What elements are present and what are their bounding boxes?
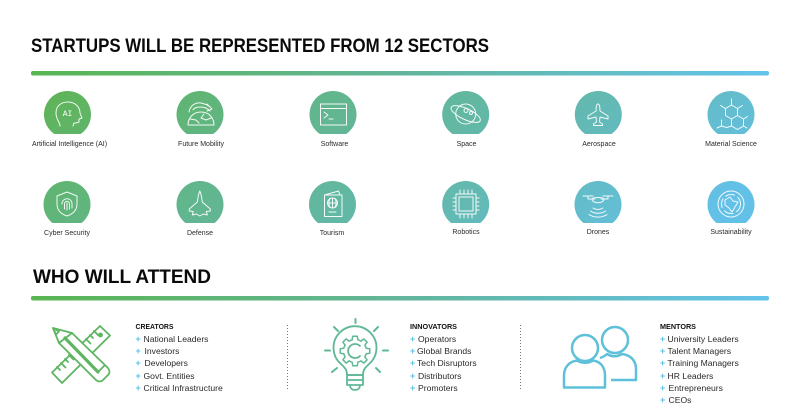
sector: Space: Space	[457, 141, 477, 148]
mentors list: +	[660, 371, 665, 381]
sector: Robotics: Robotics	[452, 229, 480, 236]
innovators list: +	[410, 383, 415, 393]
innovators list: Distributors	[418, 371, 461, 381]
innovators list: Operators	[418, 334, 456, 344]
sector: Material Science: Material Science	[705, 141, 757, 148]
mentors list: Entrepreneurs	[668, 383, 723, 393]
innovators list: Global Brands	[417, 346, 471, 356]
mentors list: CEOs	[668, 395, 691, 405]
sector: Future Mobility	[176, 91, 224, 148]
divider bar: top	[31, 71, 769, 76]
sector: Software	[310, 91, 356, 148]
creators list: +	[136, 383, 141, 393]
sector: Cyber Security: Cyber Security	[44, 230, 90, 237]
creators list: +	[136, 346, 141, 356]
sector: Artificial Intelligence: AI	[63, 110, 72, 119]
sector: Sustainability: Sustainability	[710, 229, 752, 236]
mentors list: Training Managers	[668, 358, 739, 368]
sector: Defense: Defense	[187, 230, 213, 237]
separator: right	[520, 325, 522, 389]
creators list: CREATORS	[136, 322, 174, 331]
sector: Tourism	[309, 181, 356, 237]
creators list: Investors	[144, 346, 179, 356]
sector: Artificial Intelligence	[32, 91, 107, 148]
creators list: Developers	[144, 358, 188, 368]
sector: Sustainability	[708, 181, 754, 236]
sector: Defense	[176, 181, 224, 237]
innovators list: INNOVATORS	[410, 322, 457, 331]
sector: Aerospace	[575, 91, 622, 148]
sector: Drones: Drones	[587, 229, 610, 236]
mentors list: Talent Managers	[668, 346, 731, 356]
creators list: +	[136, 358, 141, 368]
mentors list: HR Leaders	[668, 371, 713, 381]
innovators list: Tech Disruptors	[417, 358, 477, 368]
creators list: +	[136, 334, 141, 344]
sector: Robotics	[442, 181, 489, 236]
sector: Material Science	[705, 91, 757, 148]
mentors list: MENTORS	[660, 322, 696, 331]
sector: Artificial Intelligence: Artificial Intelligence (AI)	[32, 141, 107, 148]
mentors list: +	[660, 395, 665, 405]
creators list: Govt. Entities	[144, 371, 195, 381]
title: startups: STARTUPS WILL BE REPRESENTED FROM 12 SECTORS	[31, 35, 489, 57]
separator: left	[286, 325, 288, 389]
sector: Tourism: Tourism	[320, 230, 344, 237]
innovators list: +	[410, 346, 415, 356]
creators list	[136, 322, 223, 393]
sector: Aerospace: Aerospace	[582, 141, 616, 148]
icon: people	[564, 327, 636, 388]
innovators list: +	[410, 358, 415, 368]
sector: Software: Software	[321, 141, 348, 148]
sector: Drones	[574, 181, 622, 236]
sector: Future Mobility: Future Mobility	[178, 141, 224, 148]
mentors list	[660, 322, 739, 405]
innovators list: +	[410, 371, 415, 381]
divider bar: attend	[31, 296, 769, 300]
creators list: National Leaders	[144, 334, 208, 344]
mentors list: +	[660, 346, 665, 356]
icon: lightbulb with gear	[325, 319, 388, 390]
mentors list: +	[660, 334, 665, 344]
mentors list: +	[660, 383, 665, 393]
icon: pencil and ruler	[52, 326, 110, 383]
creators list: Critical Infrastructure	[144, 383, 223, 393]
mentors list: +	[660, 358, 665, 368]
sector: Cyber Security	[44, 181, 90, 237]
innovators list: +	[410, 334, 415, 344]
innovators list	[410, 322, 477, 393]
innovators list: Promoters	[418, 383, 458, 393]
sector: Space	[442, 91, 489, 148]
heading: who will attend: WHO WILL ATTEND	[33, 266, 211, 288]
creators list: +	[136, 371, 141, 381]
mentors list: University Leaders	[668, 334, 739, 344]
